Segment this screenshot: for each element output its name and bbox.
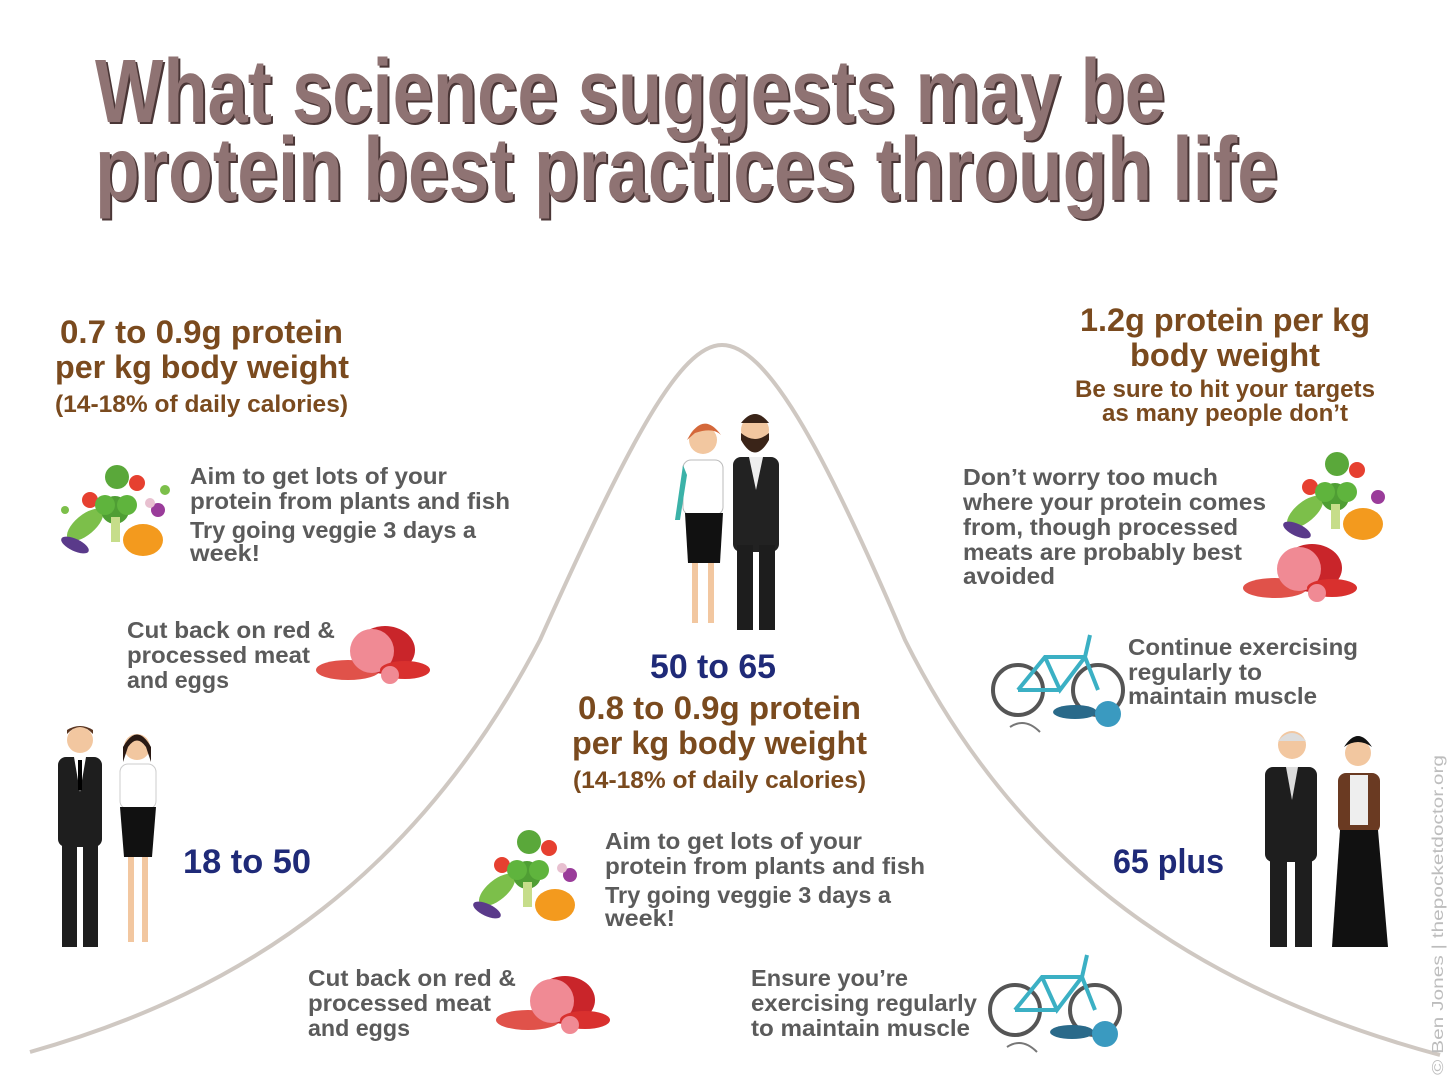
text: plants left: protein from plants and fish: [190, 488, 510, 514]
icon: bike right: [993, 635, 1123, 732]
panel: 18 to 50 recommendation: (14-18% of daily calories): [55, 391, 348, 418]
text: plants left: [189, 463, 510, 566]
title: What science suggests may be: [97, 44, 1167, 144]
text: ensure exercising: exercising regularly: [751, 990, 977, 1016]
panel: 65 plus recommendation: as many people don’t: [1102, 400, 1348, 427]
panel: 65 plus recommendation: Be sure to hit your targets: [1075, 376, 1375, 403]
text: plants center: protein from plants and fish: [605, 853, 925, 879]
credit: © Ben Jones | thepocketdoctor.org: [1430, 755, 1447, 1075]
text: cut back center: processed meat: [308, 990, 491, 1016]
text: don't worry: from, though processed: [963, 514, 1238, 540]
panel: 65 plus recommendation: 1.2g protein per kg: [1080, 302, 1370, 338]
panel: 18 to 50 recommendation: per kg body weight: [55, 349, 349, 385]
panel: 18 to 50 recommendation: 0.7 to 0.9g protein: [60, 314, 343, 350]
text: plants left: Aim to get lots of your: [190, 463, 447, 489]
text: continue exercising: Continue exercising: [1128, 634, 1358, 660]
text: continue exercising: [1128, 634, 1358, 709]
icon: vegetables center: [471, 830, 577, 922]
text: ensure exercising: Ensure you’re: [751, 965, 908, 991]
text: cut back left: and eggs: [127, 667, 229, 693]
panel: 65 plus recommendation: body weight: [1130, 337, 1320, 373]
text: continue exercising: maintain muscle: [1128, 683, 1317, 709]
panel: 50 to 65 recommendation: per kg body weight: [572, 725, 867, 761]
text: ensure exercising: to maintain muscle: [751, 1015, 970, 1041]
icon: meat right: [1243, 544, 1357, 602]
label: 18 to 50: 18 to 50: [183, 843, 311, 881]
text: continue exercising: regularly to: [1128, 659, 1262, 685]
title: [95, 42, 1280, 222]
icon: young couple: [58, 726, 156, 947]
text: ensure exercising: [751, 965, 977, 1041]
text: cut back center: and eggs: [308, 1015, 410, 1041]
panel: 18 to 50 recommendation: [55, 314, 349, 418]
text: cut back left: Cut back on red &: [127, 617, 335, 643]
text: plants center: Try going veggie 3 days a: [605, 882, 891, 908]
text: don't worry: [962, 464, 1266, 589]
text: don't worry: meats are probably best: [963, 539, 1242, 565]
text: cut back center: [308, 965, 516, 1041]
icon: older couple: [1265, 731, 1388, 947]
text: plants center: [604, 828, 925, 931]
icon: vegetables left: [59, 465, 170, 557]
icon: meat center: [496, 976, 610, 1034]
text: don't worry: where your protein comes: [962, 489, 1266, 515]
icon: meat left: [316, 626, 430, 684]
panel: 50 to 65 recommendation: [572, 648, 867, 794]
title: What science suggests may be: [95, 42, 1165, 142]
icon: bike center: [990, 955, 1120, 1052]
text: plants center: week!: [604, 905, 675, 931]
icon: vegetables right: [1281, 452, 1385, 542]
text: plants left: week!: [189, 540, 260, 566]
panel: 50 to 65 recommendation: 0.8 to 0.9g protein: [578, 690, 861, 726]
text: don't worry: Don’t worry too much: [963, 464, 1218, 490]
label: 65 plus: 65 plus: [1113, 843, 1224, 881]
icon: middle-aged couple: [675, 414, 779, 630]
text: plants left: Try going veggie 3 days a: [190, 517, 476, 543]
text: cut back left: [127, 617, 335, 693]
text: cut back center: Cut back on red &: [308, 965, 516, 991]
panel: 50 to 65 recommendation: (14-18% of daily calories): [573, 767, 866, 794]
panel: 65 plus recommendation: [1075, 302, 1375, 427]
text: plants center: Aim to get lots of your: [605, 828, 862, 854]
panel: 50 to 65 recommendation: 50 to 65: [650, 648, 776, 686]
text: cut back left: processed meat: [127, 642, 310, 668]
bell curve: [30, 345, 1440, 1055]
text: don't worry: avoided: [963, 563, 1055, 589]
